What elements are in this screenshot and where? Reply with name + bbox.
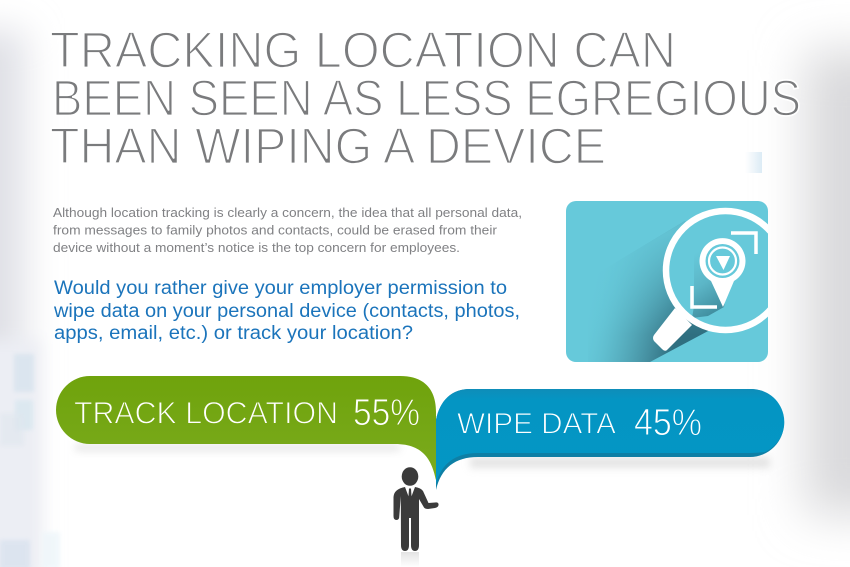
intro paragraph: Although location tracking is clearly a concern, the idea that all personal data, [53, 205, 522, 220]
icon: business person [394, 467, 439, 567]
reflection [401, 552, 419, 567]
long shadow of magnifier [599, 221, 708, 362]
lens disc [669, 229, 725, 326]
track location percent: 55% [353, 392, 420, 434]
shirt collar [405, 487, 415, 499]
title [50, 22, 801, 174]
speech bubble: wipe data 45% [436, 389, 784, 490]
wipe data label: WIPE DATA [457, 408, 616, 440]
wipe data percent: 45% [634, 402, 702, 444]
shadow top fade [627, 221, 693, 324]
intro paragraph: from messages to family photos and contacts, could be erased from their [53, 222, 498, 238]
title: TRACKING LOCATION CAN [50, 22, 676, 78]
location pin [700, 238, 746, 307]
survey question [53, 277, 520, 344]
survey question: wipe data on your personal device (contacts, photos, [53, 300, 520, 322]
title: THAN WIPING A DEVICE [50, 118, 606, 174]
pin shadow [692, 266, 725, 318]
focus brackets [692, 233, 756, 307]
lens ring [666, 211, 785, 330]
handle [653, 308, 692, 351]
survey question: apps, email, etc.) or track your location? [54, 322, 413, 344]
intro paragraph: device without a moment’s notice is the top concern for employees. [53, 240, 460, 255]
intro paragraph [53, 205, 522, 255]
speech bubble: track location 55% [56, 376, 436, 480]
icon: magnifying glass over location pin [566, 201, 785, 362]
track location label: TRACK LOCATION [74, 394, 338, 430]
survey question: Would you rather give your employer permission to [54, 277, 507, 299]
